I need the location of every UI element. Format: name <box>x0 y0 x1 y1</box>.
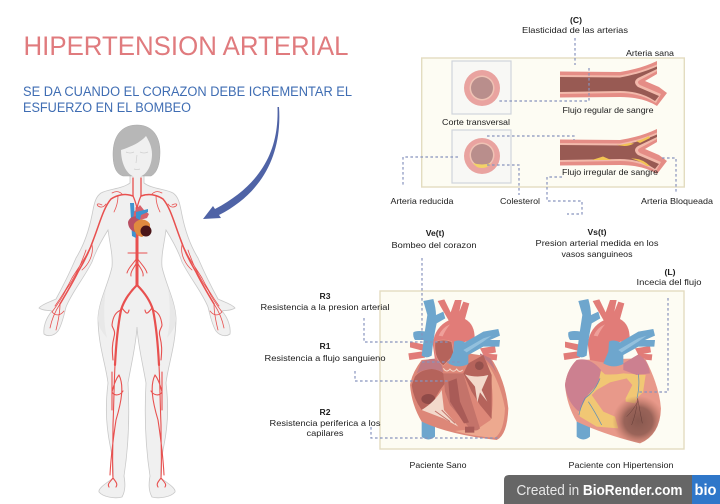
facial features <box>126 152 148 170</box>
dashed connector lines: hearts <box>355 258 668 438</box>
human body with arteries <box>39 125 235 498</box>
label: L: Incecia del flujo <box>636 277 702 287</box>
label: Arteria sana: Arteria sana <box>626 48 674 58</box>
panel: hearts <box>355 258 684 449</box>
badge: BioRender: bio <box>694 482 717 499</box>
panel: arteries <box>422 58 684 187</box>
dashed connector lines: arteries <box>403 38 676 214</box>
arteries <box>50 178 224 487</box>
label: Paciente con Hipertension: Paciente con Hipertension <box>568 460 674 470</box>
label: Vs(t): Presion arterial medida en los <box>536 238 658 248</box>
label: R1: R1 <box>320 341 331 351</box>
healthy heart <box>408 299 508 440</box>
label: R2 <box>270 407 380 438</box>
label: Colesterol: Colesterol <box>500 196 540 206</box>
label: C elasticity <box>522 15 628 35</box>
label: Vs(t): Vs(t) <box>587 227 607 237</box>
subtitle text: ESFUERZO EN EL BOMBEO <box>23 100 191 115</box>
label: Corte transversal: Corte transversal <box>442 117 510 127</box>
artery: blocked <box>560 129 667 174</box>
label: Flujo irregular: Flujo irregular de sangre <box>562 167 658 177</box>
label: Vs(t): vasos sanguineos <box>562 249 632 259</box>
body shading <box>98 288 176 338</box>
label: Arteria Bloqueada: Arteria Bloqueada <box>641 196 713 206</box>
label: C elasticity: Elasticidad de las arterias <box>522 25 628 35</box>
subtitle text: SE DA CUANDO EL CORAZON DEBE ICREMENTAR EL <box>23 84 352 99</box>
hair <box>113 125 160 176</box>
label: Paciente Sano: Paciente Sano <box>410 460 467 470</box>
arrow: curved blue arrow pointing to the body <box>203 107 279 219</box>
label: R2: Resistencia periferica a los <box>270 418 380 428</box>
label: R3 <box>260 291 390 312</box>
icon: small heart in chest <box>128 203 152 238</box>
cross section: healthy <box>452 61 511 114</box>
subtitle text <box>23 84 352 115</box>
badge: BioRender <box>504 475 720 504</box>
label: R2: capilares <box>306 428 344 438</box>
label: Arteria reducida: Arteria reducida <box>390 196 454 206</box>
label: R1: Resistencia a flujo sanguieno <box>264 353 386 363</box>
artery: healthy <box>560 61 667 106</box>
body silhouette <box>39 168 235 498</box>
label: R3: R3 <box>320 291 331 301</box>
badge: BioRender: Created in BioRender.com <box>516 483 682 499</box>
label: Ve(t): Ve(t) <box>426 228 444 238</box>
label: L: (L) <box>665 267 676 277</box>
face <box>121 136 152 177</box>
hypertensive heart <box>563 299 664 446</box>
label: L <box>636 267 702 287</box>
label: R1 <box>264 341 386 363</box>
cross section: reduced <box>452 130 511 183</box>
label: R2: R2 <box>320 407 331 417</box>
label: R3: Resistencia a la presion arterial <box>260 302 390 312</box>
label: Ve(t): Bombeo del corazon <box>392 240 477 250</box>
label: Vs(t) <box>536 227 658 259</box>
label: C elasticity: (C) <box>570 15 582 25</box>
title: HIPERTENSION ARTERIAL <box>24 31 348 61</box>
label: Flujo regular: Flujo regular de sangre <box>562 105 654 115</box>
label: Ve(t) <box>392 228 477 250</box>
